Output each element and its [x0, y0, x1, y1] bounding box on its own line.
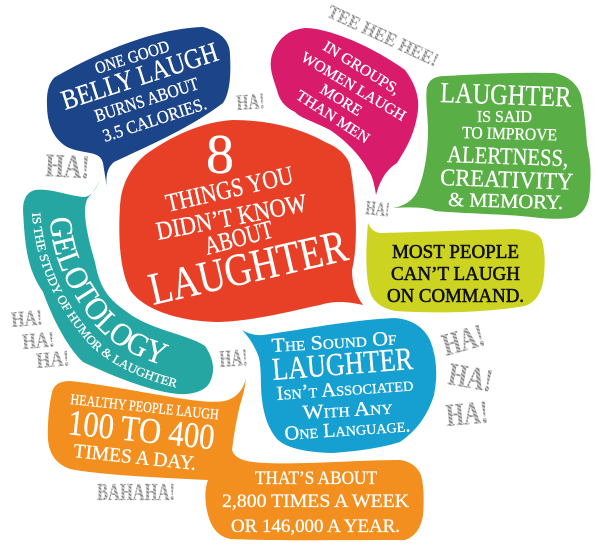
sketch: ha beside light blue bubble: HA! — [219, 345, 248, 373]
red speech bubble — [119, 120, 363, 322]
text: gelotology: GELOTOLOGY — [50, 218, 170, 364]
text: on command: ON COMMAND. — [387, 285, 524, 307]
sketch: left ha 2: HA! — [21, 326, 55, 354]
title: laughter: LAUGHTER — [144, 220, 352, 315]
sketch: bahaha: BAHAHA! — [97, 480, 175, 506]
text: to improve: TO IMPROVE — [462, 123, 557, 144]
text: the sound of: The Sound Of — [271, 327, 397, 357]
panel: title (red bubble) — [119, 120, 363, 322]
text: 3.5 calories: 3.5 CALORIES. — [100, 93, 209, 146]
pink speech bubble — [271, 28, 418, 195]
orange speech bubble — [48, 378, 424, 540]
text: alertness: ALERTNESS, — [447, 142, 569, 172]
title: things you: THINGS YOU — [163, 160, 296, 218]
text: healthy people laugh: HEALTHY PEOPLE LAUGH — [70, 392, 220, 424]
text: more: MORE — [317, 81, 365, 120]
panel: gelotology (teal bubble) — [23, 180, 214, 394]
text: 100 to 400: 100 TO 400 — [66, 402, 217, 457]
sketch: ha above teal bubble: HA! — [45, 148, 90, 186]
text: that's about: THAT’S ABOUT — [255, 468, 377, 489]
text: than men: THAN MEN — [293, 87, 373, 147]
light blue speech bubble — [242, 318, 436, 453]
sketch: left ha 1: HA! — [10, 304, 43, 332]
panel: on command (yellow bubble) — [366, 223, 545, 312]
sketch: ha between pink and green: HA! — [364, 197, 391, 221]
text: burns about: BURNS ABOUT — [92, 73, 201, 126]
text: in groups: IN GROUPS, — [320, 38, 403, 98]
sketch: right ha 2: HA! — [446, 355, 495, 399]
panel: 100 to 400 times a day (orange bubble) — [48, 378, 424, 540]
text: is the study of humor and laughter: IS THE STUDY OF HUMOR & LAUGHTER — [32, 212, 176, 388]
title: 8: 8 — [206, 124, 234, 186]
title: about: ABOUT — [201, 215, 276, 261]
text: 2,800 times a week: 2,800 TIMES A WEEK — [222, 491, 409, 512]
text: most people: MOST PEOPLE — [392, 241, 519, 263]
text: can't laugh: CAN’T LAUGH — [391, 263, 520, 285]
text: belly laugh: BELLY LAUGH — [58, 37, 222, 117]
sketch: tee hee hee: TEE HEE HEE! — [324, 1, 442, 71]
panel: women laugh (pink bubble) — [271, 28, 418, 195]
text: with any: With Any — [302, 397, 393, 424]
panel: belly laugh (blue bubble) — [47, 27, 230, 188]
text: times a day: TIMES A DAY. — [72, 440, 197, 475]
blue speech bubble — [47, 27, 230, 188]
sketch: right ha 3: HA! — [444, 393, 489, 433]
sketch: left ha 3: HA! — [35, 345, 70, 373]
text: creativity: CREATIVITY — [440, 165, 574, 196]
text: laughter: LAUGHTER — [440, 77, 572, 114]
panel: alertness (green bubble) — [393, 73, 591, 219]
sketch: ha near blue bubble: HA! — [236, 88, 265, 115]
sketch: laughter sounds — [10, 1, 495, 506]
text: women laugh: WOMEN LAUGH — [298, 49, 409, 125]
teal speech bubble — [23, 180, 213, 394]
yellow speech bubble — [366, 223, 545, 312]
green speech bubble — [393, 73, 591, 219]
text: and memory: & MEMORY. — [448, 189, 563, 214]
text: is said: IS SAID — [477, 107, 532, 126]
title: didn't know: DIDN’T KNOW — [154, 188, 310, 246]
text: laughter: LAUGHTER — [271, 340, 415, 387]
text: isn't associated: Isn’t Associated — [276, 373, 414, 405]
text: or 146,000 a year: OR 146,000 A YEAR. — [231, 516, 400, 537]
sketch: right ha 1: HA! — [438, 317, 488, 363]
text: one language: One Language. — [284, 414, 411, 445]
text: one good: ONE GOOD — [92, 37, 172, 78]
panel: sound of laughter (light blue bubble) — [242, 318, 436, 453]
